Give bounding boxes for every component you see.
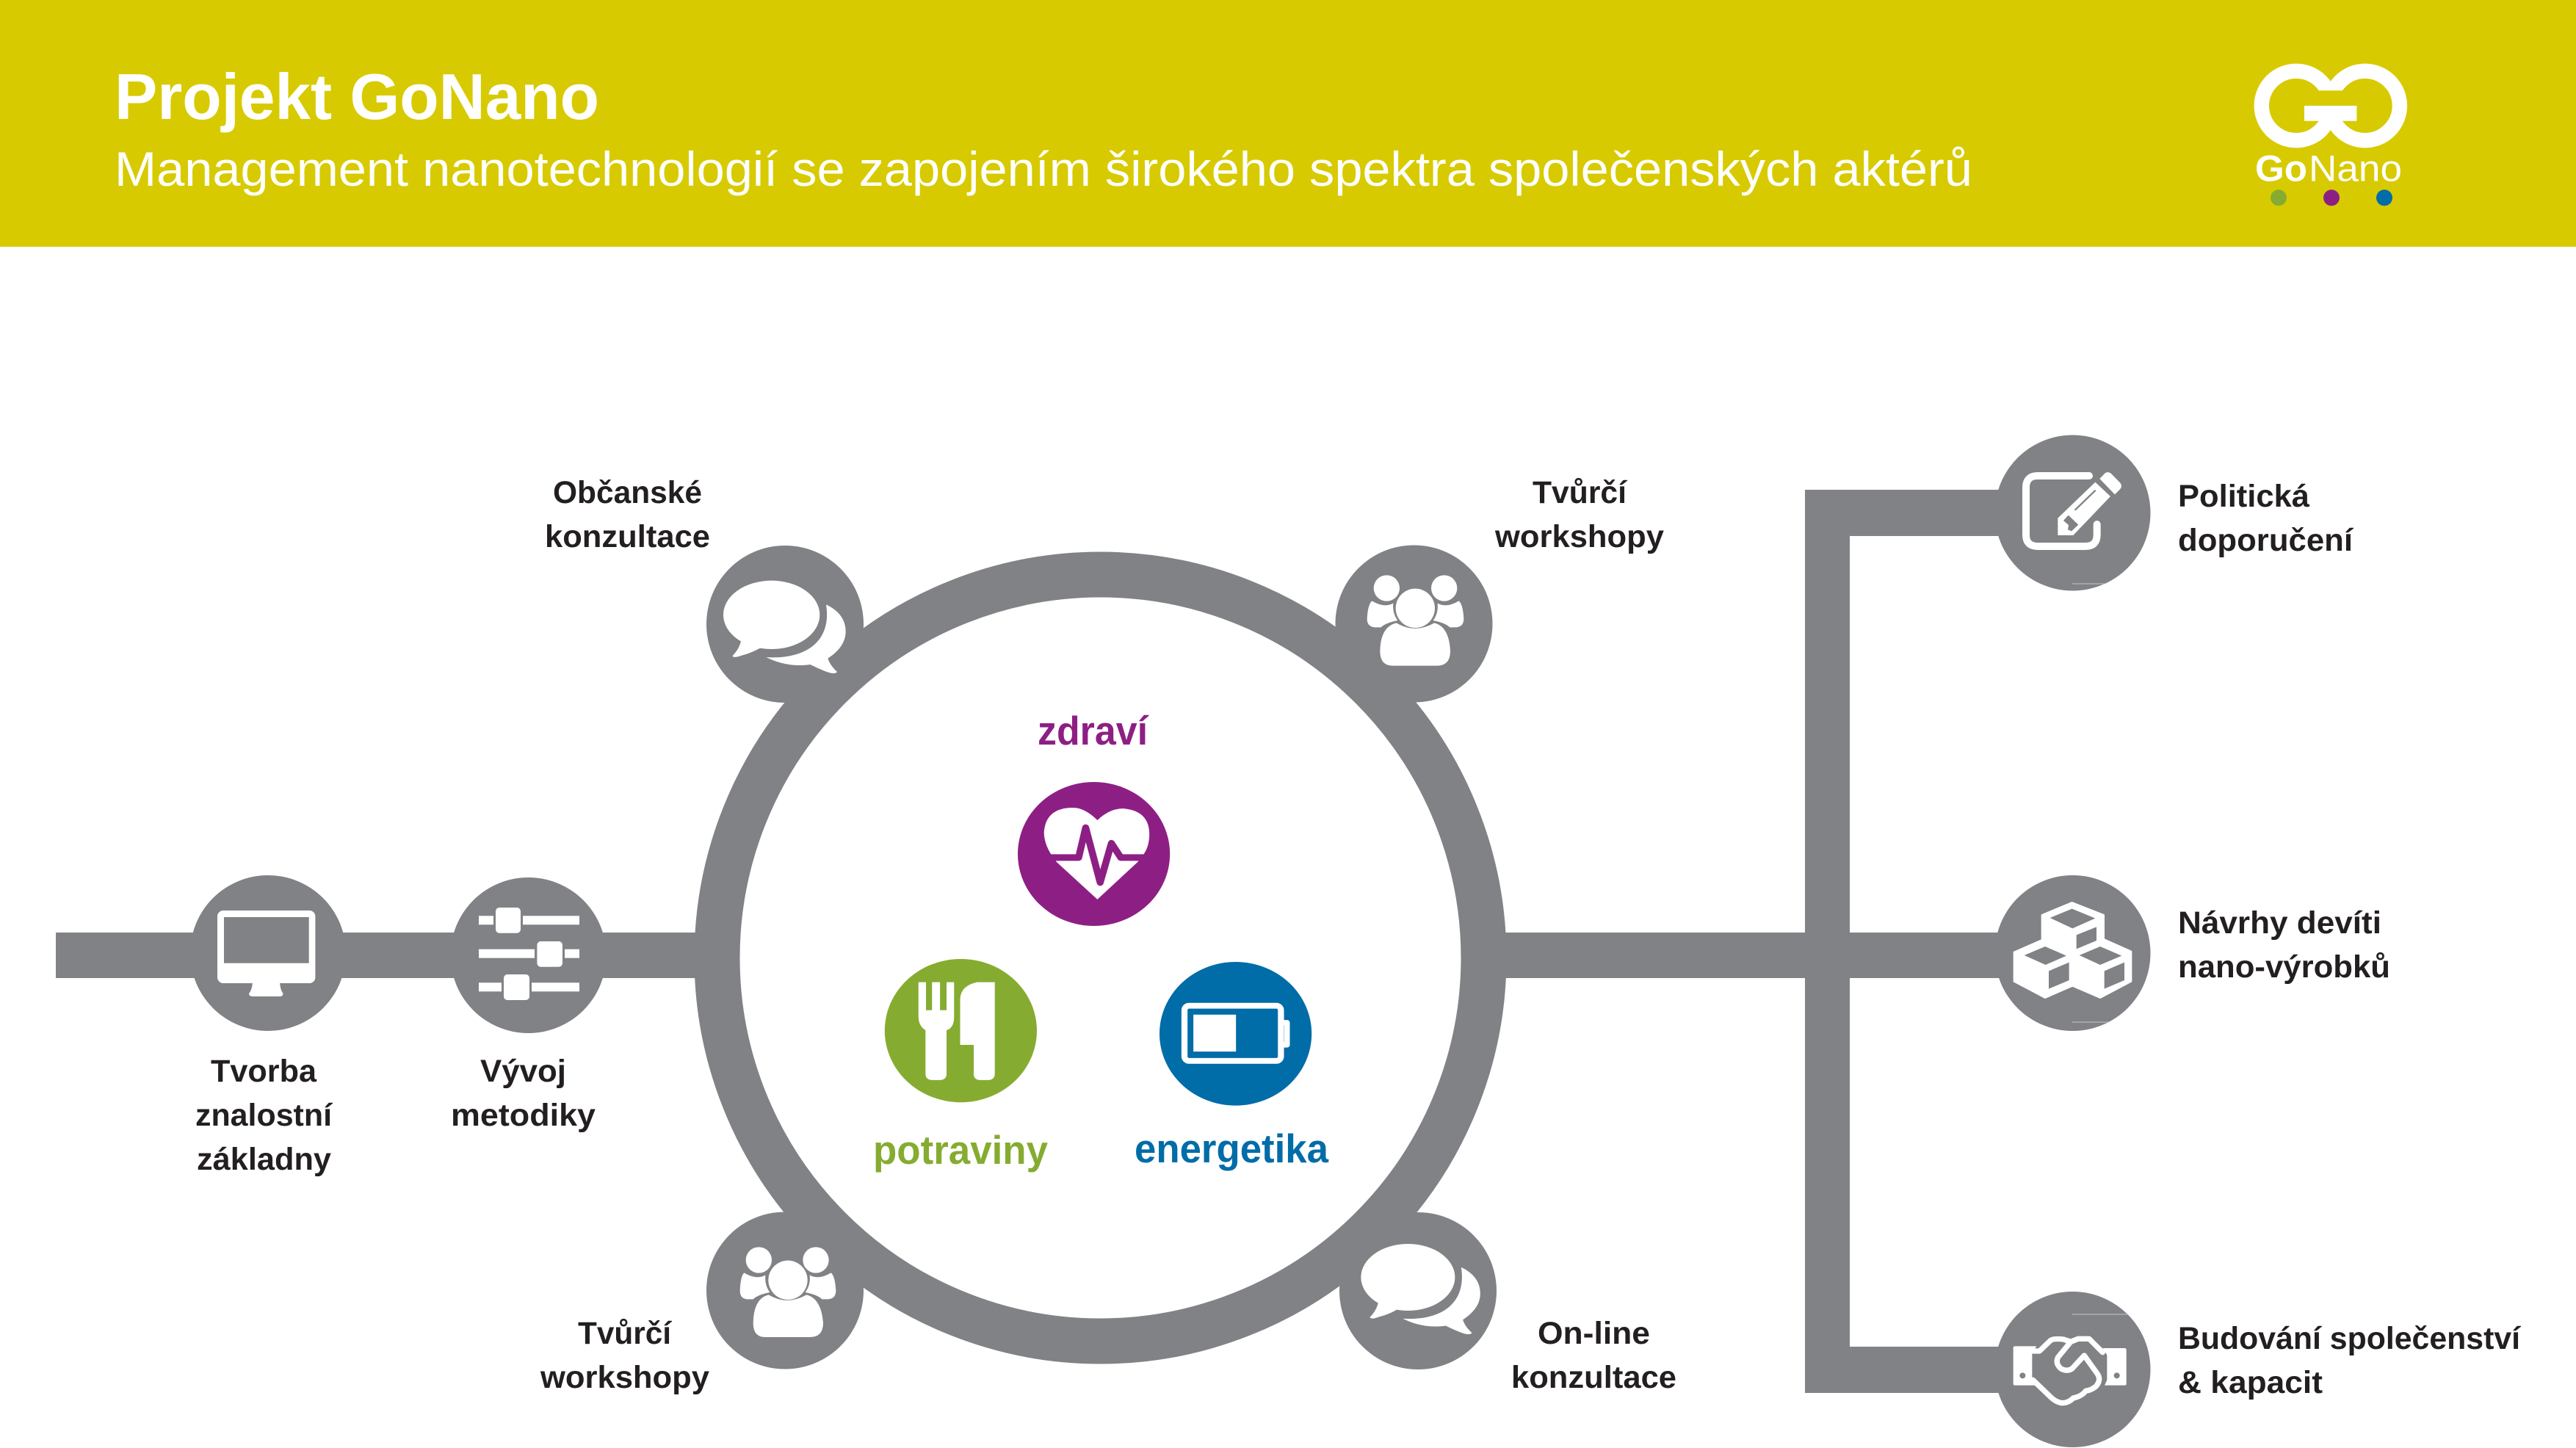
sector: health: [1018, 708, 1170, 926]
label: potraviny: potraviny: [873, 1127, 1048, 1173]
label: Tvorba znalostní základny: Tvorba: [211, 1054, 317, 1089]
icon: speech bubbles: [1361, 1244, 1480, 1334]
label: Tvorba znalostní základny: znalostní: [195, 1098, 333, 1133]
connector lines: [56, 490, 2072, 1393]
label: Tvůrčí workshopy top: workshopy: [1494, 519, 1664, 554]
icon: speech bubbles: [723, 581, 846, 673]
label: Návrhy devíti nano-výrobků: [2178, 905, 2390, 985]
node: policy recommendations: [1994, 435, 2150, 590]
label: Tvorba znalostní základny: [195, 1054, 333, 1177]
subtitle: Management nanotechnologií se zapojením širokého spektra společenských aktérů: [115, 142, 1972, 196]
label: Politická doporučení: [2178, 479, 2354, 558]
node: citizen consultations: [706, 546, 864, 703]
node: creative workshops top: [1335, 545, 1492, 702]
label: Vývoj metodiky: Vývoj: [480, 1054, 566, 1089]
label: Tvorba znalostní základny: základny: [197, 1142, 331, 1177]
label: Budování společenství & kapacit: Budování společenství: [2178, 1321, 2522, 1356]
icon: battery: [1184, 1006, 1287, 1061]
node: online consultations: [1339, 1212, 1497, 1369]
label: Tvůrčí workshopy top: Tvůrčí: [1533, 475, 1628, 510]
label: Občanské konzultace: Občanské: [553, 475, 702, 510]
label: Návrhy devíti nano-výrobků: Návrhy devíti: [2178, 905, 2381, 941]
icon: people: [1367, 575, 1464, 666]
label: Tvůrčí workshopy bottom: workshopy: [540, 1360, 709, 1395]
node: methodology: [451, 877, 607, 1033]
label: Politická doporučení: doporučení: [2178, 523, 2354, 558]
node: product designs: [1994, 875, 2150, 1031]
icon: handshake: [2014, 1339, 2127, 1403]
label: energetika: energetika: [1135, 1126, 1328, 1171]
label: Budování společenství & kapacit: [2178, 1321, 2522, 1400]
icon: fork and knife: [919, 982, 995, 1080]
label: Budování společenství & kapacit: & kapacit: [2178, 1365, 2323, 1400]
label: Tvůrčí workshopy bottom: [540, 1316, 709, 1395]
icon: cubes: [2014, 902, 2131, 998]
logo: GoNano: Go: [2255, 148, 2307, 189]
label: Návrhy devíti nano-výrobků: nano-výrobků: [2178, 949, 2390, 985]
logo: GoNano: [2255, 71, 2402, 206]
label: Občanské konzultace: konzultace: [545, 519, 710, 554]
label: Tvůrčí workshopy bottom: Tvůrčí: [578, 1316, 673, 1351]
central ring: [717, 574, 1483, 1341]
label: Politická doporučení: Politická: [2178, 479, 2310, 514]
icon: people: [740, 1247, 836, 1337]
node: creative workshops bottom: [706, 1212, 864, 1369]
node: capacity building: [1994, 1292, 2150, 1447]
label: On-line konzultace: [1511, 1316, 1676, 1395]
icon: sliders: [479, 908, 579, 1000]
label: zdraví: zdraví: [1038, 708, 1149, 753]
label: Tvůrčí workshopy top: [1494, 475, 1664, 554]
label: On-line konzultace: On-line: [1538, 1316, 1650, 1351]
icon: pencil and note: [2026, 472, 2121, 546]
label: Vývoj metodiky: metodiky: [451, 1098, 596, 1133]
sector: energy: [1135, 962, 1328, 1171]
logo: GoNano: Nano: [2309, 148, 2402, 189]
node: knowledge base: [190, 875, 346, 1031]
title: Projekt GoNano: [115, 60, 599, 133]
label: Občanské konzultace: [545, 475, 710, 554]
icon: heart with pulse: [1044, 808, 1149, 899]
sector: food: [873, 959, 1048, 1173]
label: Vývoj metodiky: [451, 1054, 596, 1133]
label: On-line konzultace: konzultace: [1511, 1360, 1676, 1395]
icon: monitor: [217, 911, 315, 996]
header band: [0, 0, 2576, 247]
